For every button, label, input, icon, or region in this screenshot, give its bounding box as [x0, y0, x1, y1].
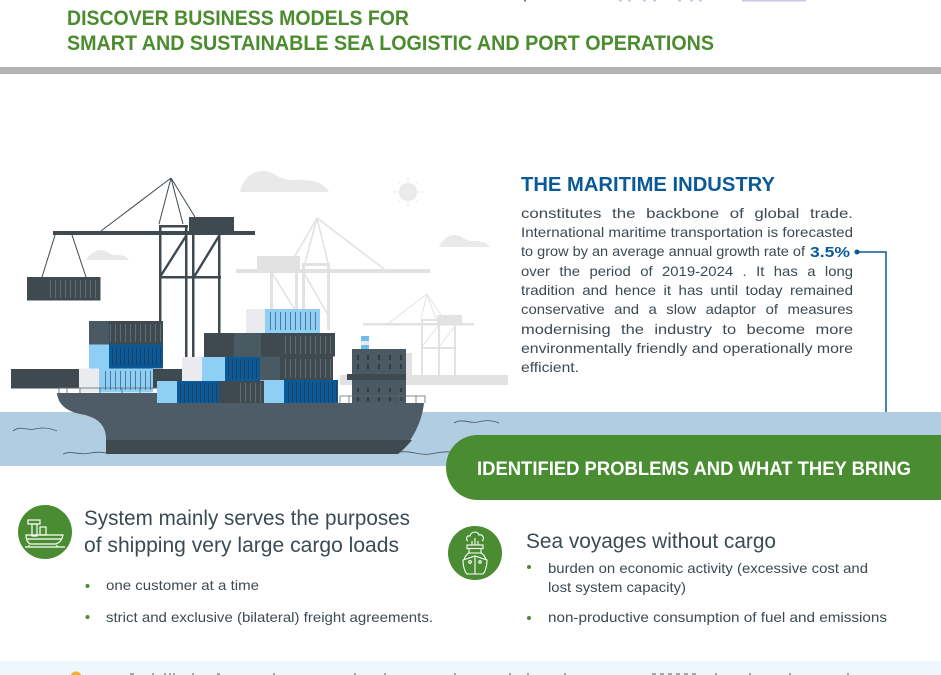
icon: ship with emissions	[448, 526, 502, 580]
bullet list: lost system capacity)	[548, 579, 686, 595]
banner: identified problems	[446, 435, 941, 500]
heading: system serves large cargo: of shipping very large cargo loads	[84, 534, 399, 557]
background clouds and sun	[86, 171, 490, 260]
panel: large cargo loads	[18, 505, 433, 625]
paragraph: maritime industry: tradition and hence it has until today remained	[521, 282, 853, 298]
bullet list: non-productive consumption of fuel and emissions	[548, 609, 887, 625]
bullet list: one customer at a time	[106, 577, 259, 593]
banner: identified problems: IDENTIFIED PROBLEMS AND WHAT THEY BRING	[477, 459, 911, 480]
paragraph: maritime industry: modernising the industry to become more	[521, 321, 853, 337]
heading: sea voyages: Sea voyages without cargo	[526, 530, 776, 553]
background port cranes	[236, 218, 508, 385]
container stacks	[11, 309, 338, 404]
ship hull	[57, 388, 425, 454]
title: DISCOVER BUSINESS MODELS FOR	[67, 7, 409, 30]
paragraph: maritime industry: conservative and a slow adaptor of measures	[521, 301, 853, 317]
title	[67, 7, 714, 55]
ship superstructure	[347, 336, 406, 403]
hanging container	[27, 277, 100, 300]
bullet list	[86, 577, 433, 625]
bullet list: strict and exclusive (bilateral) freight agreements.	[106, 609, 433, 625]
bullet list	[527, 560, 887, 625]
connector from growth rate to banner	[854, 250, 886, 412]
cropped top header fragments	[524, 0, 806, 2]
heading: system serves large cargo: System mainly serves the purposes	[84, 507, 410, 530]
paragraph: maritime industry: International maritime transportation is forecasted	[521, 224, 853, 240]
sea	[0, 412, 941, 466]
bottom panel cropped at page edge	[0, 661, 941, 675]
icon: cargo ship	[18, 505, 72, 559]
panel: voyages without cargo	[448, 526, 887, 625]
waves	[13, 421, 499, 454]
paragraph: maritime industry: 3.5%	[810, 244, 850, 261]
bullet list: burden on economic activity (excessive cost and	[548, 560, 868, 576]
paragraph: maritime industry: over the period of 2019-2024 . It has a long	[521, 263, 853, 279]
title: SMART AND SUSTAINABLE SEA LOGISTIC AND PORT OPERATIONS	[67, 32, 714, 55]
paragraph: maritime industry: efficient.	[521, 359, 579, 375]
paragraph: maritime industry: environmentally friendly and operationally more	[521, 340, 853, 356]
paragraph: maritime industry	[521, 205, 853, 375]
paragraph: maritime industry: constitutes the backbone of global trade.	[521, 205, 853, 221]
main crane	[42, 178, 255, 360]
heading: system serves large cargo	[84, 507, 410, 557]
paragraph: maritime industry: to grow by an average annual growth rate of	[521, 243, 805, 259]
heading: the maritime industry: THE MARITIME INDUSTRY	[521, 174, 776, 196]
